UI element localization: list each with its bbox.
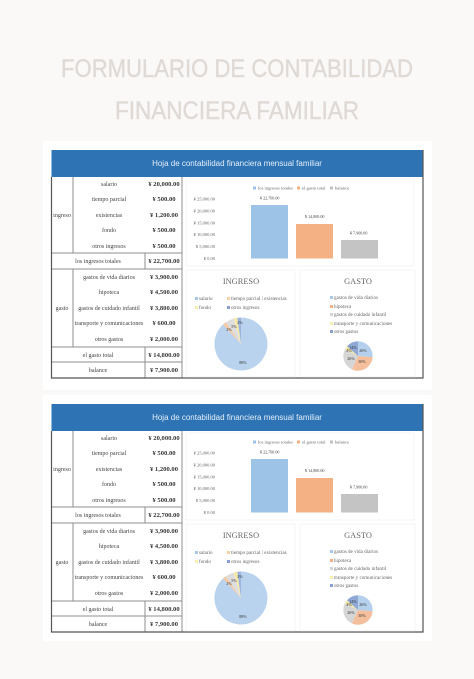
gasto legend: transporte y comunicaciones: [334, 575, 392, 581]
sheet header: Hoja de contabilidad financiera mensual familiar: [152, 413, 322, 422]
bar chart: [186, 433, 414, 520]
table: income and expenses: ¥ 600.00: [152, 574, 176, 581]
pie chart: gasto: 14%: [349, 345, 357, 350]
table: income and expenses: ¥ 500.00: [152, 450, 176, 457]
bar chart: ¥ 15,000.00: [194, 220, 216, 226]
chart legend: balance: [335, 186, 349, 190]
table: income and expenses: ¥ 20,000.00: [148, 435, 180, 442]
gasto legend: gastos de cuidado infantil: [334, 565, 387, 572]
bar chart: ¥ 5,000.00: [196, 244, 216, 250]
bar chart: ¥ 10,000.00: [194, 232, 216, 238]
table: income and expenses: existencias: [96, 213, 123, 219]
bar chart: ¥ 7,900.00: [350, 230, 367, 236]
table: income and expenses: el gasto total: [83, 353, 114, 359]
table: income and expenses: gastos de vida diarios: [83, 275, 136, 281]
panel: accounting sheet 2: [43, 395, 432, 641]
bar chart: ¥ 20,000.00: [194, 462, 216, 468]
table: income and expenses: gasto: [56, 306, 68, 312]
chart legend: el gasto total: [302, 186, 326, 190]
pie chart: gasto: GASTO: [344, 277, 372, 286]
table: income and expenses: balance: [89, 368, 107, 374]
bar chart: ¥ 0.00: [204, 256, 216, 261]
table: income and expenses: ¥ 2,000.00: [150, 590, 179, 597]
table: income and expenses: ingreso: [53, 467, 71, 473]
bar chart: ¥ 7,900.00: [350, 484, 367, 490]
pie chart: gasto: 14%: [349, 599, 357, 604]
sheet header: [52, 150, 423, 177]
pie chart: ingreso: 5%: [231, 578, 237, 583]
sheet card: [43, 395, 432, 641]
table: income and expenses: ¥ 14,800.00: [148, 606, 180, 613]
table: income and expenses: existencias: [96, 467, 123, 473]
table: income and expenses: gastos de cuidado infantil: [78, 305, 140, 312]
table: income and expenses: ¥ 20,000.00: [148, 181, 180, 188]
gasto legend: gastos de vida diarios: [334, 549, 378, 555]
table: income and expenses: ¥ 500.00: [152, 497, 176, 504]
table: income and expenses: el gasto total: [83, 607, 114, 613]
table: income and expenses: ¥ 3,800.00: [150, 305, 179, 312]
table: income and expenses: los ingresos totales: [75, 259, 121, 265]
ingreso legend: tiempo parcial ⁞ existencias: [231, 550, 287, 556]
pie chart: ingreso: [186, 524, 295, 631]
table: income and expenses: tiempo parcial: [92, 197, 127, 203]
table: income and expenses: salario: [101, 182, 117, 188]
pie chart: ingreso: INGRESO: [223, 531, 259, 540]
table: income and expenses: fondo: [102, 227, 116, 234]
table: income and expenses: ¥ 3,800.00: [150, 559, 179, 566]
table: income and expenses: ¥ 3,900.00: [150, 274, 179, 281]
pie chart: ingreso: [186, 270, 295, 377]
table: income and expenses: gastos de cuidado infantil: [78, 559, 140, 566]
bar chart: ¥ 25,000.00: [194, 196, 216, 202]
chart legend: los ingresos totales: [258, 186, 293, 190]
sheet card: [43, 141, 432, 390]
table: income and expenses: ingreso: [53, 213, 71, 219]
bar chart: ¥ 0.00: [204, 510, 216, 515]
gasto legend: gastos de vida diarios: [334, 295, 378, 301]
table: income and expenses: ¥ 4,500.00: [150, 289, 179, 296]
table: income and expenses: ¥ 500.00: [152, 227, 176, 234]
table: income and expenses: ¥ 500.00: [152, 243, 176, 250]
table: income and expenses: ¥ 2,000.00: [150, 336, 179, 343]
gasto legend: [330, 295, 392, 335]
table: income and expenses: transporte y comunicaciones: [75, 321, 144, 327]
title: [61, 55, 413, 125]
ingreso legend: fondo: [199, 304, 211, 311]
title: FORMULARIO DE CONTABILIDAD: [61, 55, 413, 83]
pie chart: ingreso: INGRESO: [223, 277, 259, 286]
bar chart: ¥ 22,700.00: [260, 450, 279, 456]
pie chart: ingreso: 2%: [237, 574, 243, 579]
table: income and expenses: ¥ 4,500.00: [150, 543, 179, 550]
ingreso legend: tiempo parcial ⁞ existencias: [231, 296, 287, 302]
gasto legend: hipoteca: [334, 304, 352, 310]
ingreso legend: salario: [199, 550, 213, 556]
table: income and expenses: otros gastos: [95, 337, 124, 343]
pie chart: ingreso: 2%: [226, 581, 232, 586]
chart legend: [253, 440, 349, 444]
pie chart: gasto: 26%: [359, 602, 367, 607]
ingreso legend: otros ingresos: [231, 305, 259, 311]
table: income and expenses: [52, 150, 423, 378]
table: income and expenses: ¥ 500.00: [152, 481, 176, 488]
gasto legend: hipoteca: [334, 558, 352, 564]
gasto legend: otros gastos: [334, 329, 358, 335]
pie chart: ingreso: 2%: [226, 327, 232, 332]
pie chart: gasto: 26%: [347, 610, 355, 615]
chart legend: [253, 186, 349, 190]
gasto legend: gastos de cuidado infantil: [334, 311, 387, 318]
ingreso legend: salario: [199, 296, 213, 302]
chart legend: balance: [335, 440, 349, 444]
ingreso legend: otros ingresos: [231, 559, 259, 565]
table: income and expenses: tiempo parcial: [92, 451, 127, 457]
ingreso legend: fondo: [199, 558, 211, 565]
ingreso legend: [195, 550, 287, 565]
table: income and expenses: ¥ 3,900.00: [150, 528, 179, 535]
sheet header: Hoja de contabilidad financiera mensual familiar: [152, 159, 322, 168]
pie chart: gasto: [300, 270, 415, 377]
pie chart: gasto: GASTO: [344, 531, 372, 540]
table: income and expenses: fondo: [102, 481, 116, 488]
pie chart: ingreso: 88%: [239, 360, 247, 365]
bar chart: [186, 179, 414, 266]
table: income and expenses: los ingresos totales: [75, 513, 121, 519]
table: income and expenses: ¥ 500.00: [152, 196, 176, 203]
table: income and expenses: ¥ 22,700.00: [148, 512, 180, 519]
table: income and expenses: ¥ 22,700.00: [148, 258, 180, 265]
table: income and expenses: ¥ 7,900.00: [150, 367, 179, 374]
bar chart: ¥ 22,700.00: [260, 196, 279, 202]
pie chart: gasto: [300, 524, 415, 631]
pie chart: gasto: 26%: [347, 356, 355, 361]
table: income and expenses: salario: [101, 436, 117, 442]
table: income and expenses: ¥ 1,200.00: [150, 466, 179, 473]
bar chart: ¥ 20,000.00: [194, 208, 216, 214]
table: income and expenses: ¥ 7,900.00: [150, 621, 179, 628]
bar chart: ¥ 25,000.00: [194, 450, 216, 456]
table: income and expenses: hipoteca: [99, 544, 119, 550]
pie chart: gasto: 26%: [359, 348, 367, 353]
bar chart: ¥ 5,000.00: [196, 498, 216, 504]
bar chart: ¥ 15,000.00: [194, 474, 216, 480]
table: income and expenses: ¥ 1,200.00: [150, 212, 179, 219]
table: income and expenses: ¥ 600.00: [152, 320, 176, 327]
table: income and expenses: hipoteca: [99, 290, 119, 296]
chart legend: el gasto total: [302, 440, 326, 444]
sheet header: [52, 404, 423, 431]
bar chart: ¥ 14,800.00: [305, 214, 324, 220]
table: income and expenses: balance: [89, 622, 107, 628]
pie chart: ingreso: 5%: [231, 324, 237, 329]
gasto legend: transporte y comunicaciones: [334, 321, 392, 327]
ingreso legend: [195, 296, 287, 311]
table: income and expenses: gastos de vida diarios: [83, 529, 136, 535]
bar chart: ¥ 14,800.00: [305, 468, 324, 474]
pie chart: gasto: 4%: [346, 602, 352, 607]
table: income and expenses: otros ingresos: [92, 244, 126, 250]
gasto legend: [330, 549, 392, 589]
table: income and expenses: transporte y comunicaciones: [75, 575, 144, 581]
pie chart: gasto: 30%: [358, 613, 366, 618]
chart legend: los ingresos totales: [258, 440, 293, 444]
table: income and expenses: otros gastos: [95, 591, 124, 597]
table: income and expenses: [52, 404, 423, 632]
title: FINANCIERA FAMILIAR: [115, 97, 359, 125]
pie chart: ingreso: 88%: [239, 614, 247, 619]
pie chart: gasto: 4%: [346, 348, 352, 353]
table: income and expenses: otros ingresos: [92, 498, 126, 504]
bar chart: ¥ 10,000.00: [194, 486, 216, 492]
table: income and expenses: ¥ 14,800.00: [148, 352, 180, 359]
gasto legend: otros gastos: [334, 583, 358, 589]
table: income and expenses: gasto: [56, 560, 68, 566]
pie chart: gasto: 30%: [358, 359, 366, 364]
pie chart: ingreso: 2%: [237, 320, 243, 325]
panel: accounting sheet 1: [43, 141, 432, 390]
